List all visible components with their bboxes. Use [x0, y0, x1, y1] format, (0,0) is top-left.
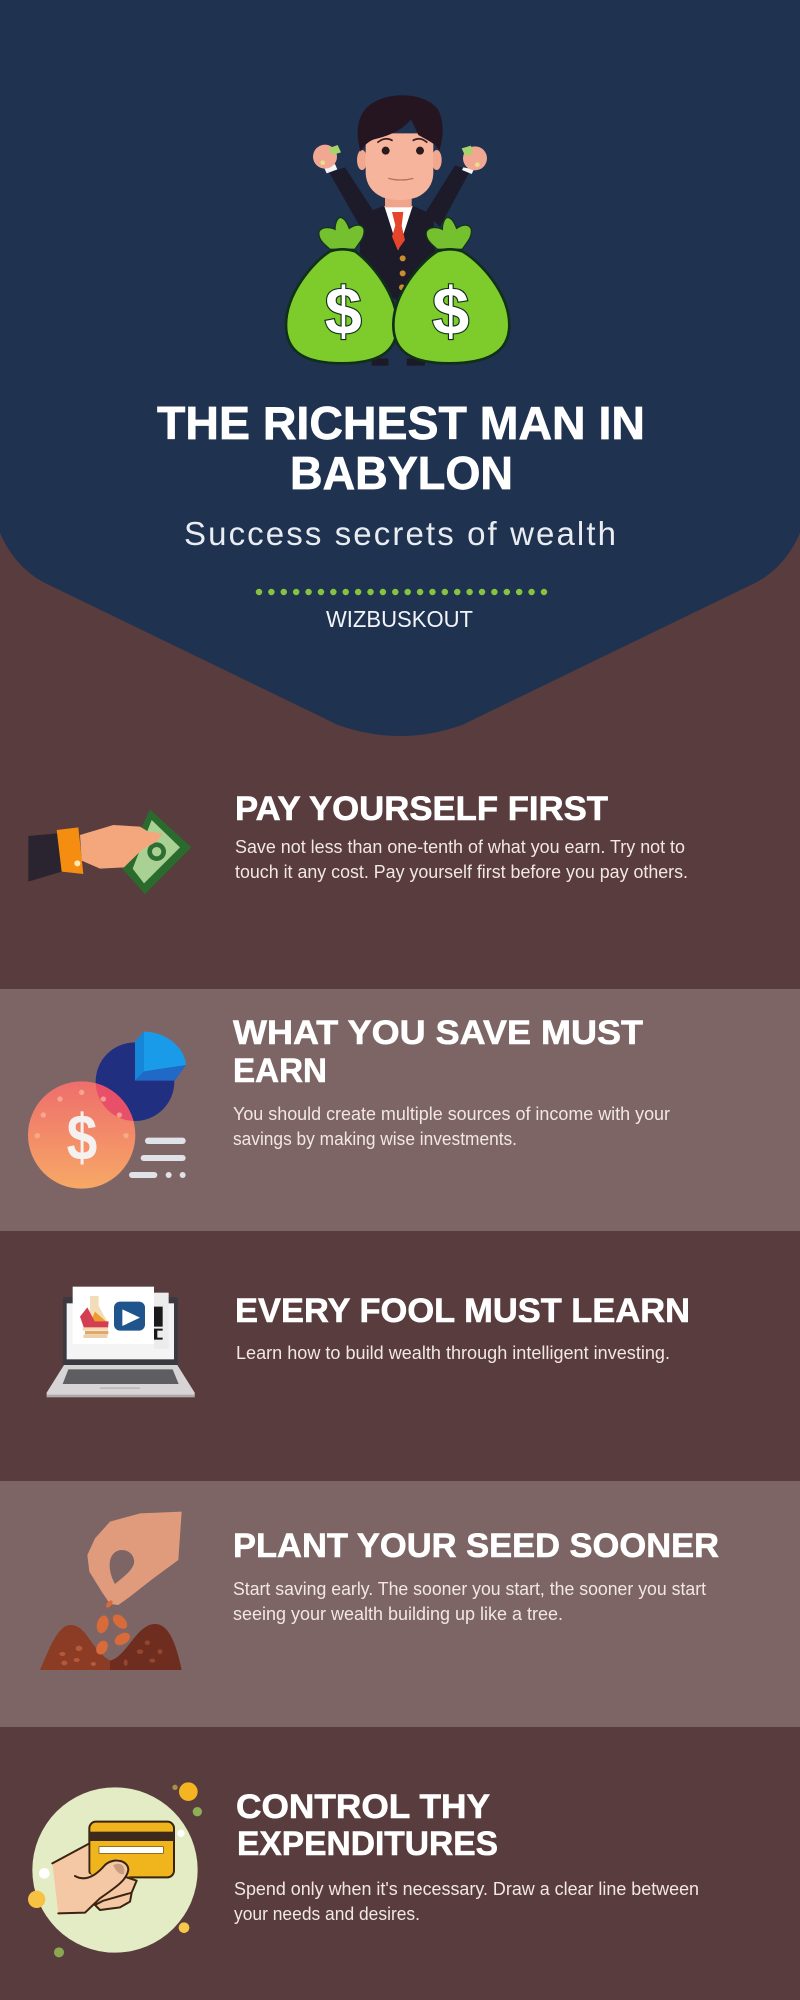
eyes and brows	[377, 139, 427, 155]
screen	[67, 1303, 174, 1359]
mouth	[388, 178, 413, 180]
hand	[87, 1512, 182, 1605]
man's feet	[372, 358, 425, 366]
cuff	[57, 827, 83, 874]
bag body	[286, 249, 397, 363]
dotted divider	[259, 589, 544, 595]
icon: coin and pie chart	[28, 1032, 186, 1189]
panel: pay yourself first	[28, 790, 688, 894]
banknote	[122, 809, 191, 894]
body text: seeing your wealth building up like a tree.	[233, 1603, 563, 1624]
heading	[236, 1788, 498, 1863]
icon: hand holding credit card	[28, 1782, 202, 1957]
icon: hand planting seeds	[40, 1512, 182, 1670]
keyboard	[63, 1369, 179, 1384]
body text: Learn how to build wealth through intelligent investing.	[236, 1342, 670, 1363]
body text: You should create multiple sources of income with your	[233, 1103, 670, 1124]
subtitle: Success secrets of wealth	[184, 515, 616, 552]
body text: Spend only when it's necessary. Draw a clear line between	[234, 1878, 699, 1899]
base edge	[47, 1395, 195, 1397]
body text: your needs and desires.	[234, 1903, 420, 1924]
body text: savings by making wise investments.	[233, 1128, 517, 1149]
trackpad notch	[100, 1387, 140, 1389]
face	[366, 133, 433, 200]
pie circle	[96, 1042, 174, 1121]
band background	[0, 989, 800, 1231]
hair	[358, 95, 443, 152]
title: THE RICHEST MAN IN	[157, 397, 645, 449]
body text	[235, 836, 688, 882]
title	[157, 397, 645, 499]
body text	[233, 1578, 706, 1624]
panel: what you save must earn	[0, 989, 800, 1231]
title: BABYLON	[290, 447, 513, 499]
panel: control thy expenditures	[28, 1782, 699, 1957]
body text	[234, 1878, 699, 1924]
heading: EARN	[233, 1052, 327, 1090]
icon: laptop	[47, 1287, 195, 1397]
text lines	[129, 1138, 186, 1178]
hand	[80, 825, 162, 869]
heading	[233, 1014, 643, 1090]
background circle	[32, 1787, 198, 1953]
decorative dots	[28, 1782, 202, 1957]
back page	[154, 1293, 169, 1349]
play button	[114, 1302, 145, 1331]
ears	[357, 150, 442, 170]
body text: touch it any cost. Pay yourself first before you pay others.	[235, 861, 688, 882]
body text: Start saving early. The sooner you start, the sooner you start	[233, 1578, 706, 1599]
heading: PLANT YOUR SEED SOONER	[233, 1527, 719, 1565]
seeds	[94, 1599, 132, 1657]
front page	[73, 1287, 154, 1344]
fists holding cash	[313, 145, 487, 170]
coin overlap	[96, 1083, 134, 1121]
laptop lid	[63, 1297, 178, 1366]
heading: EXPENDITURES	[237, 1825, 498, 1863]
coin dots	[35, 1090, 129, 1138]
man's raised arms	[329, 165, 471, 227]
panel: hero header	[0, 0, 800, 736]
heading: WHAT YOU SAVE MUST	[233, 1014, 643, 1052]
dollar sign: $	[325, 275, 362, 349]
right bag body	[393, 249, 509, 363]
pie slice	[135, 1032, 186, 1081]
laptop base	[47, 1365, 195, 1397]
band background	[0, 1481, 800, 1727]
cuffs	[324, 164, 474, 174]
cuff button	[74, 860, 80, 866]
hand	[52, 1844, 137, 1913]
tie	[392, 212, 405, 250]
heading: EVERY FOOL MUST LEARN	[235, 1292, 690, 1330]
hand outline	[52, 1844, 137, 1913]
panel: every fool must learn	[47, 1287, 690, 1397]
soil left	[40, 1625, 110, 1670]
books and flask	[80, 1296, 109, 1338]
panel: plant your seed sooner	[0, 1481, 800, 1727]
shirt	[384, 206, 413, 250]
icon: hand holding cash	[28, 809, 191, 894]
coin dollar sign: $	[67, 1100, 97, 1173]
right bag top knot	[426, 217, 471, 249]
heading: CONTROL THY	[236, 1788, 490, 1826]
thumbnail	[113, 1864, 124, 1874]
credit card	[89, 1822, 174, 1877]
suit buttons	[399, 255, 406, 290]
sleeve	[28, 833, 62, 882]
hero navy shield	[0, 0, 800, 736]
body text: Save not less than one-tenth of what you earn. Try not to	[235, 836, 685, 857]
soil right	[110, 1624, 182, 1670]
page code block	[154, 1307, 163, 1340]
neck	[385, 193, 412, 207]
body text	[233, 1103, 670, 1149]
icon: businessman with money bags	[286, 95, 509, 366]
heading: PAY YOURSELF FIRST	[235, 790, 608, 828]
bag top knot	[319, 217, 364, 249]
right money bag	[393, 217, 509, 363]
coin	[28, 1081, 135, 1189]
soil specks	[59, 1646, 96, 1666]
left money bag	[286, 217, 397, 363]
author: WIZBUSKOUT	[326, 606, 473, 632]
suit body	[360, 206, 437, 300]
right dollar sign: $	[432, 275, 469, 349]
